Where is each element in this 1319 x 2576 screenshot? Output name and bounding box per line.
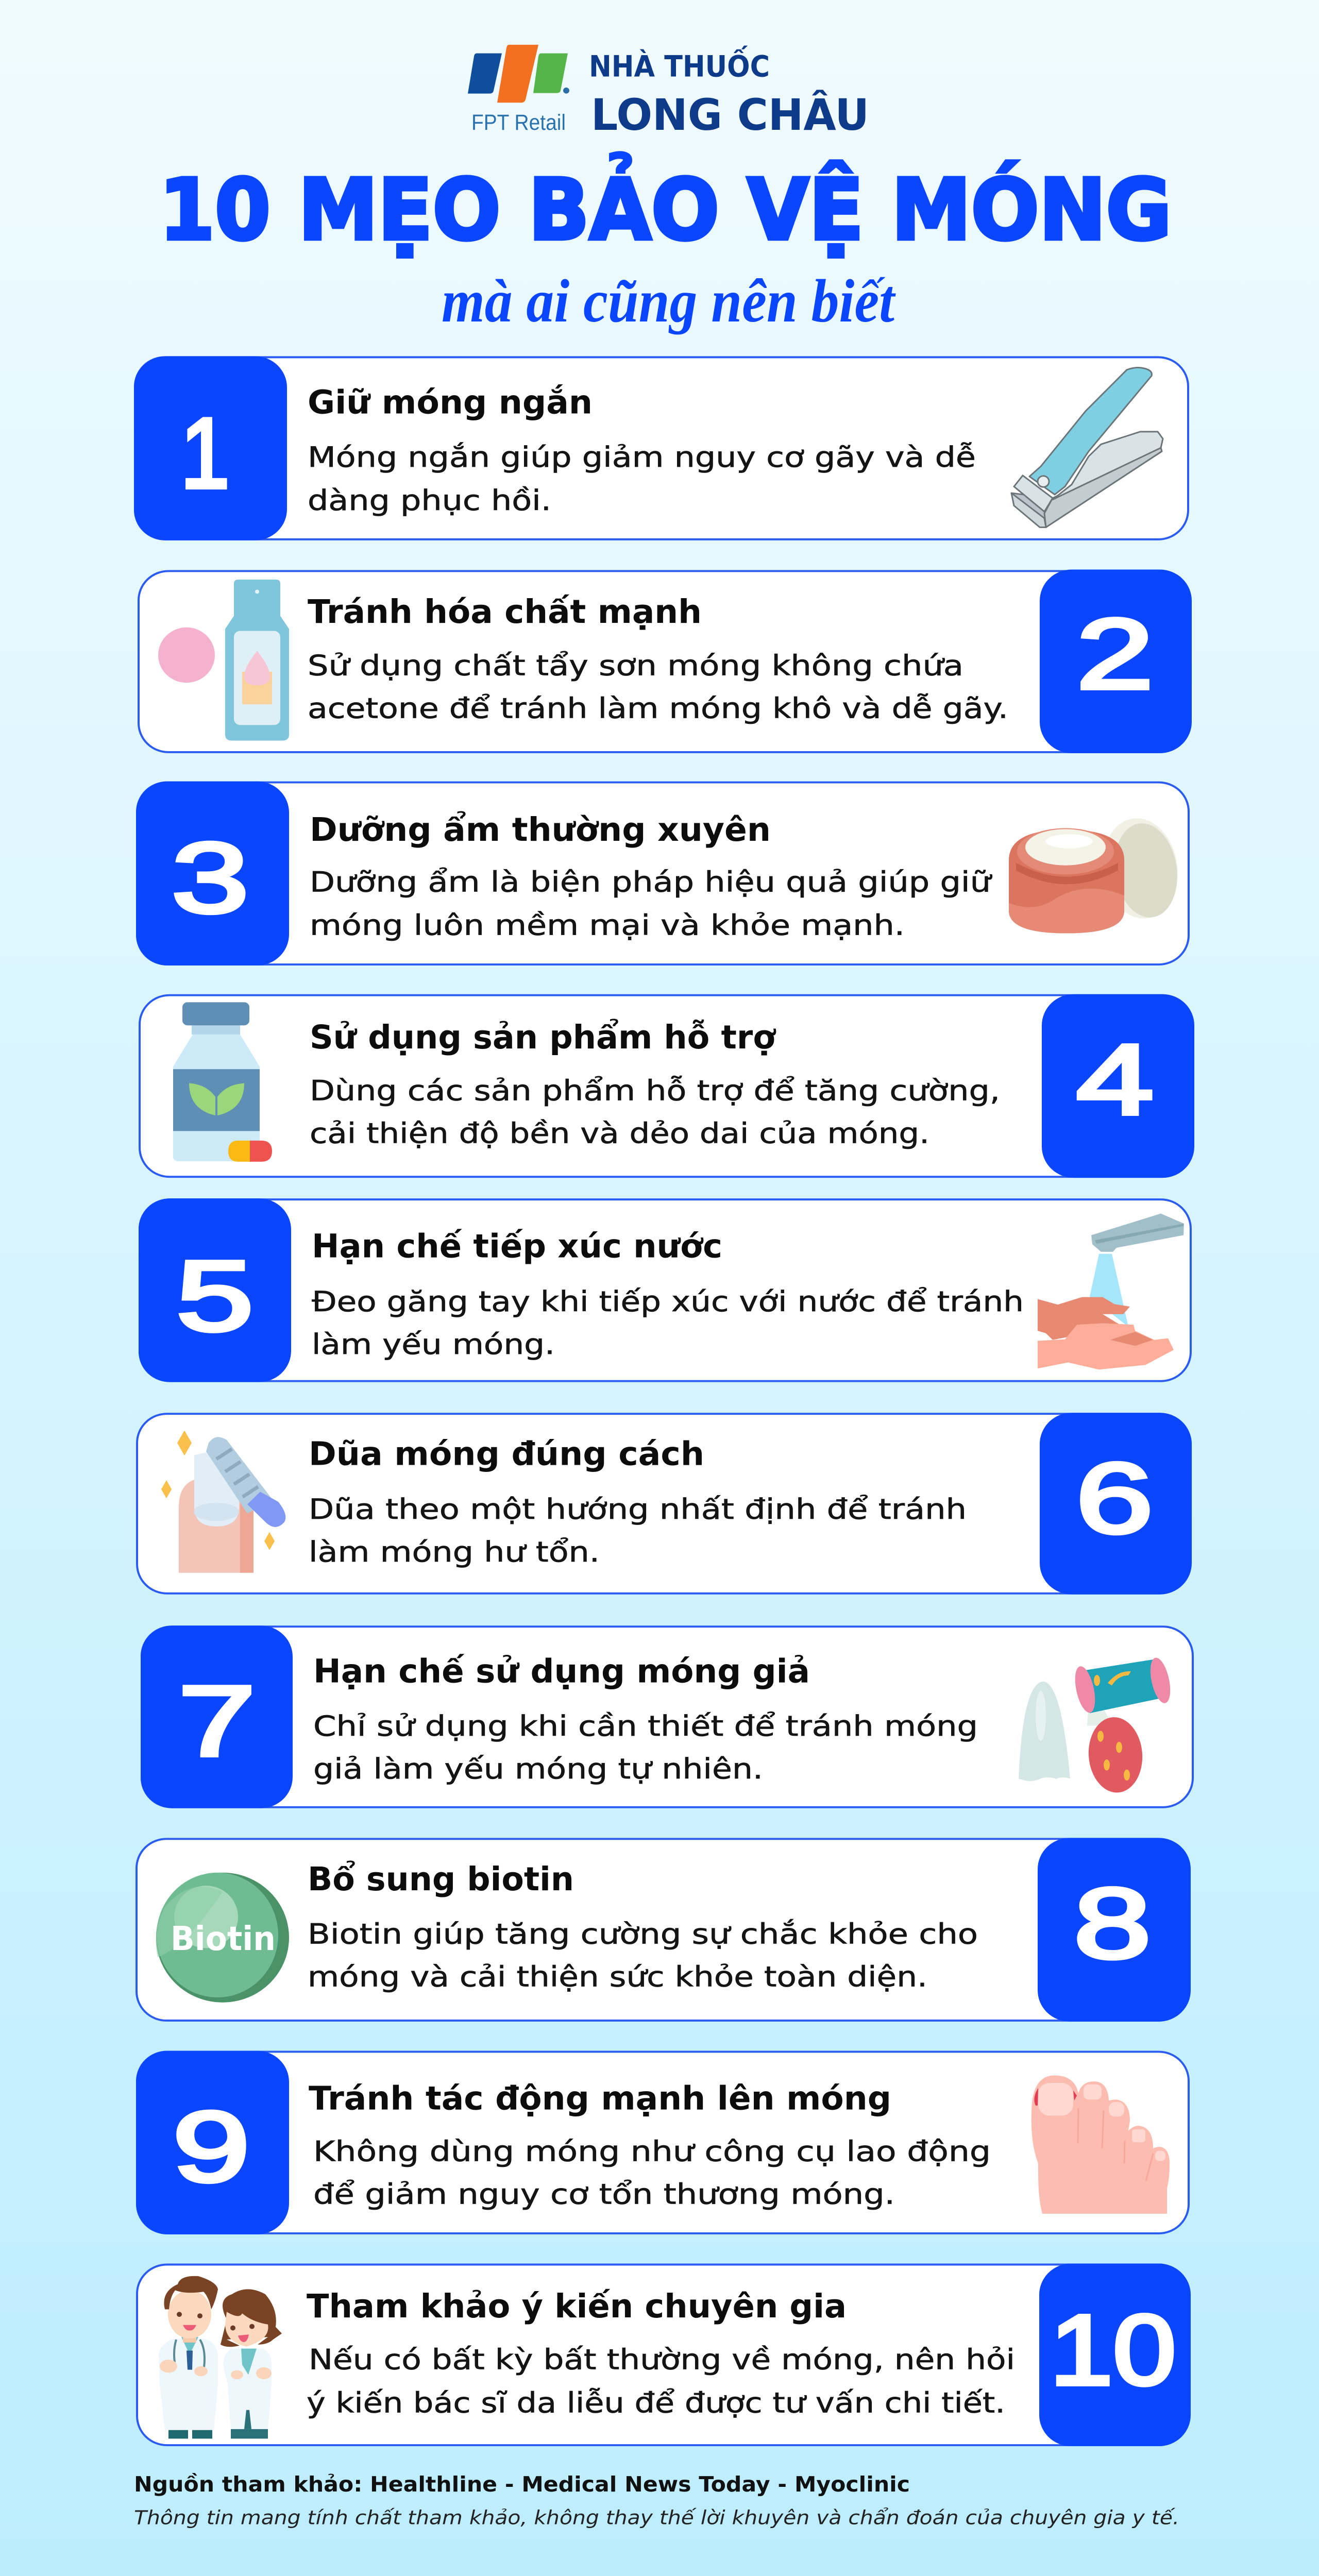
number 6: 6: [1076, 1443, 1153, 1554]
body text: móng và cải thiện sức khỏe toàn diện.: [308, 1961, 927, 1993]
body text: làm yếu móng.: [312, 1329, 555, 1361]
body text: [308, 1918, 978, 1993]
body text: cải thiện độ bền và dẻo dai của móng.: [310, 1117, 929, 1150]
body text: Không dùng móng như công cụ lao động: [313, 2136, 991, 2168]
body text: Chỉ sử dụng khi cần thiết để tránh móng: [313, 1710, 978, 1743]
panel: tip 5: [139, 1198, 1191, 1382]
number 5: 5: [176, 1241, 253, 1352]
text: Biotin: Biotin: [171, 1920, 276, 1958]
number 1: 1: [180, 398, 229, 509]
body text: móng luôn mềm mại và khỏe mạnh.: [310, 909, 905, 942]
title: 10 MẸO BẢO VỆ MÓNG: [159, 152, 1172, 259]
body text: [313, 2136, 991, 2211]
subtitle: mà ai cũng nên biết: [442, 267, 896, 335]
heading: Bổ sung biotin: [308, 1860, 574, 1899]
body text: [309, 1494, 967, 1569]
panel: tip 9: [136, 2050, 1189, 2234]
body text: Sử dụng chất tẩy sơn móng không chứa: [308, 650, 963, 682]
icon: remover bottle and cotton pad: [158, 580, 289, 741]
icon: nail clipper: [1011, 367, 1163, 527]
body text: Nếu có bất kỳ bất thường về móng, nên hỏi: [309, 2344, 1015, 2376]
body text: Đeo găng tay khi tiếp xúc với nước để tránh: [312, 1286, 1024, 1318]
icon: toes: [1031, 2075, 1170, 2214]
body text: [313, 1710, 978, 1786]
icon: two doctors: [159, 2276, 282, 2438]
body text: dàng phục hồi.: [308, 485, 551, 517]
body text: Dưỡng ẩm là biện pháp hiệu quả giúp giữ: [310, 866, 992, 899]
panel: tip 2: [139, 569, 1192, 753]
heading: Hạn chế tiếp xúc nước: [312, 1227, 722, 1265]
heading: Tham khảo ý kiến chuyên gia: [307, 2287, 847, 2326]
body text: [308, 650, 1008, 725]
number 7: 7: [178, 1666, 256, 1777]
body text: giả làm yếu móng tự nhiên.: [313, 1753, 763, 1786]
icon: cream jar: [1009, 814, 1184, 934]
body text: [310, 1075, 1000, 1150]
text: Long Châu: LONG CHÂU: [591, 90, 869, 141]
panel: tip 4: [140, 994, 1194, 1178]
panel: tip 7: [141, 1625, 1193, 1808]
number 2: 2: [1076, 599, 1154, 709]
icon: supplement bottle: [173, 1002, 272, 1162]
text: FPT Retail: FPT Retail: [471, 110, 566, 135]
body text: ý kiến bác sĩ da liễu để được tư vấn chi tiết.: [307, 2387, 1005, 2419]
body text: [312, 1286, 1024, 1361]
icon: biotin pill: [156, 1873, 289, 2003]
heading: Dưỡng ẩm thường xuyên: [310, 811, 771, 849]
body text: Dũa theo một hướng nhất định để tránh: [309, 1494, 967, 1526]
number 9: 9: [173, 2091, 250, 2202]
body text: Biotin giúp tăng cường sự chắc khỏe cho: [308, 1918, 978, 1951]
body text: [308, 442, 976, 517]
panel: tip 10: [137, 2264, 1191, 2446]
heading: Dũa móng đúng cách: [309, 1435, 704, 1473]
heading: Giữ móng ngắn: [308, 383, 593, 422]
body text: làm móng hư tổn.: [309, 1536, 600, 1569]
icon: washing hands under tap: [1038, 1213, 1184, 1369]
body text: [307, 2344, 1015, 2419]
text: Nhà thuốc: NHÀ THUỐC: [589, 45, 770, 83]
disclaimer: Thông tin mang tính chất tham khảo, không thay thế lời khuyên và chẩn đoán của chuyên gia y tế.: [134, 2506, 1179, 2529]
heading: Hạn chế sử dụng móng giả: [313, 1652, 810, 1690]
body text: Dùng các sản phẩm hỗ trợ để tăng cường,: [310, 1075, 1000, 1108]
body text: [310, 866, 992, 942]
heading: Tránh tác động mạnh lên móng: [309, 2079, 891, 2118]
panel: tip 8: [137, 1838, 1191, 2022]
body text: Móng ngắn giúp giảm nguy cơ gãy và dễ: [308, 442, 976, 474]
panel: tip 1: [134, 356, 1188, 540]
number 10: 10: [1050, 2295, 1176, 2405]
body text: acetone để tránh làm móng khô và dễ gãy.: [308, 692, 1008, 725]
heading: Tránh hóa chất mạnh: [308, 593, 702, 631]
heading: Sử dụng sản phẩm hỗ trợ: [310, 1019, 776, 1057]
number 3: 3: [172, 823, 249, 934]
icon: nail file and finger: [161, 1430, 285, 1573]
source line: Nguồn tham khảo: Healthline - Medical News Today - Myoclinic: [134, 2471, 910, 2497]
number 4: 4: [1076, 1024, 1154, 1136]
number 8: 8: [1074, 1868, 1151, 1979]
logo: FPT Retail Nhà thuốc Long Châu: [468, 45, 869, 141]
panel: tip 6: [137, 1413, 1192, 1595]
body text: để giảm nguy cơ tổn thương móng.: [313, 2178, 895, 2211]
panel: tip 3: [136, 782, 1189, 965]
icon: FPT stripes: [468, 45, 569, 103]
icon: false nails and polish: [1019, 1656, 1174, 1794]
